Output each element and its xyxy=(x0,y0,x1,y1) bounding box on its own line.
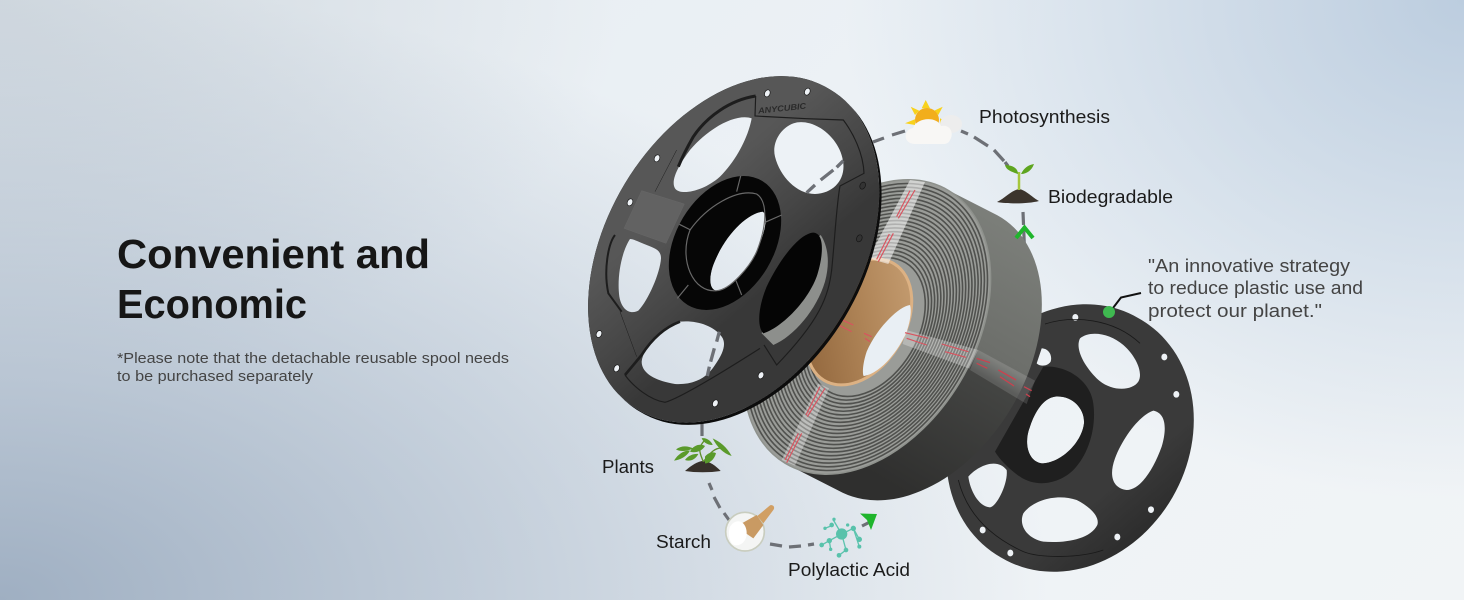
recess outlines xyxy=(606,96,864,402)
note text xyxy=(117,351,509,385)
label: biodegradable: Biodegradable xyxy=(1048,186,1173,207)
rear flange xyxy=(946,304,1194,572)
flange rim shadow xyxy=(588,76,882,425)
hole B backdrop xyxy=(774,122,843,194)
flange disc xyxy=(588,76,879,423)
filament spool xyxy=(693,135,1042,519)
right window interior xyxy=(759,233,822,333)
spool face with windings xyxy=(693,135,1041,519)
brand mark: ANYCUBIC xyxy=(756,101,808,116)
label: polylactic acid: Polylactic Acid xyxy=(788,559,910,580)
label: photosynthesis: Photosynthesis xyxy=(979,106,1110,127)
note text: to be purchased separately xyxy=(117,369,314,385)
icon: polylactic acid molecule xyxy=(819,518,862,558)
hub ring dividers xyxy=(677,176,782,298)
label: quote: "An innovative strategy xyxy=(1148,255,1351,276)
label: plants: Plants xyxy=(602,456,654,477)
rear flange small holes xyxy=(980,314,1179,556)
label plate xyxy=(624,191,684,243)
spool side wall xyxy=(790,188,1042,500)
title: Economic xyxy=(117,281,307,327)
rear flange hub xyxy=(995,367,1094,483)
face tape and core opening xyxy=(782,180,978,466)
icon: green up arrow xyxy=(1016,228,1033,238)
icon: plants xyxy=(674,438,732,472)
label: quote: protect our planet." xyxy=(1148,300,1322,321)
kraft core xyxy=(785,240,933,404)
dashed cycle line xyxy=(702,131,1025,547)
icon: sun and cloud xyxy=(905,100,962,144)
title xyxy=(117,231,430,327)
right window showing spool xyxy=(762,235,828,345)
icon: green arrow xyxy=(860,514,877,530)
note text: *Please note that the detachable reusable spool needs xyxy=(117,351,509,367)
icon: seedling xyxy=(997,164,1039,203)
flange small holes xyxy=(595,87,867,408)
spool side tape xyxy=(970,350,1035,404)
hub ring xyxy=(669,176,781,310)
callout pointer xyxy=(1103,293,1141,318)
front flange xyxy=(588,76,882,425)
title: Convenient and xyxy=(117,231,430,277)
label: quote: to reduce plastic use and xyxy=(1148,277,1363,298)
icon: starch bowl xyxy=(726,505,774,551)
label: starch: Starch xyxy=(656,531,711,552)
label: quote xyxy=(1148,255,1363,321)
dashes seen through holes xyxy=(707,161,843,376)
